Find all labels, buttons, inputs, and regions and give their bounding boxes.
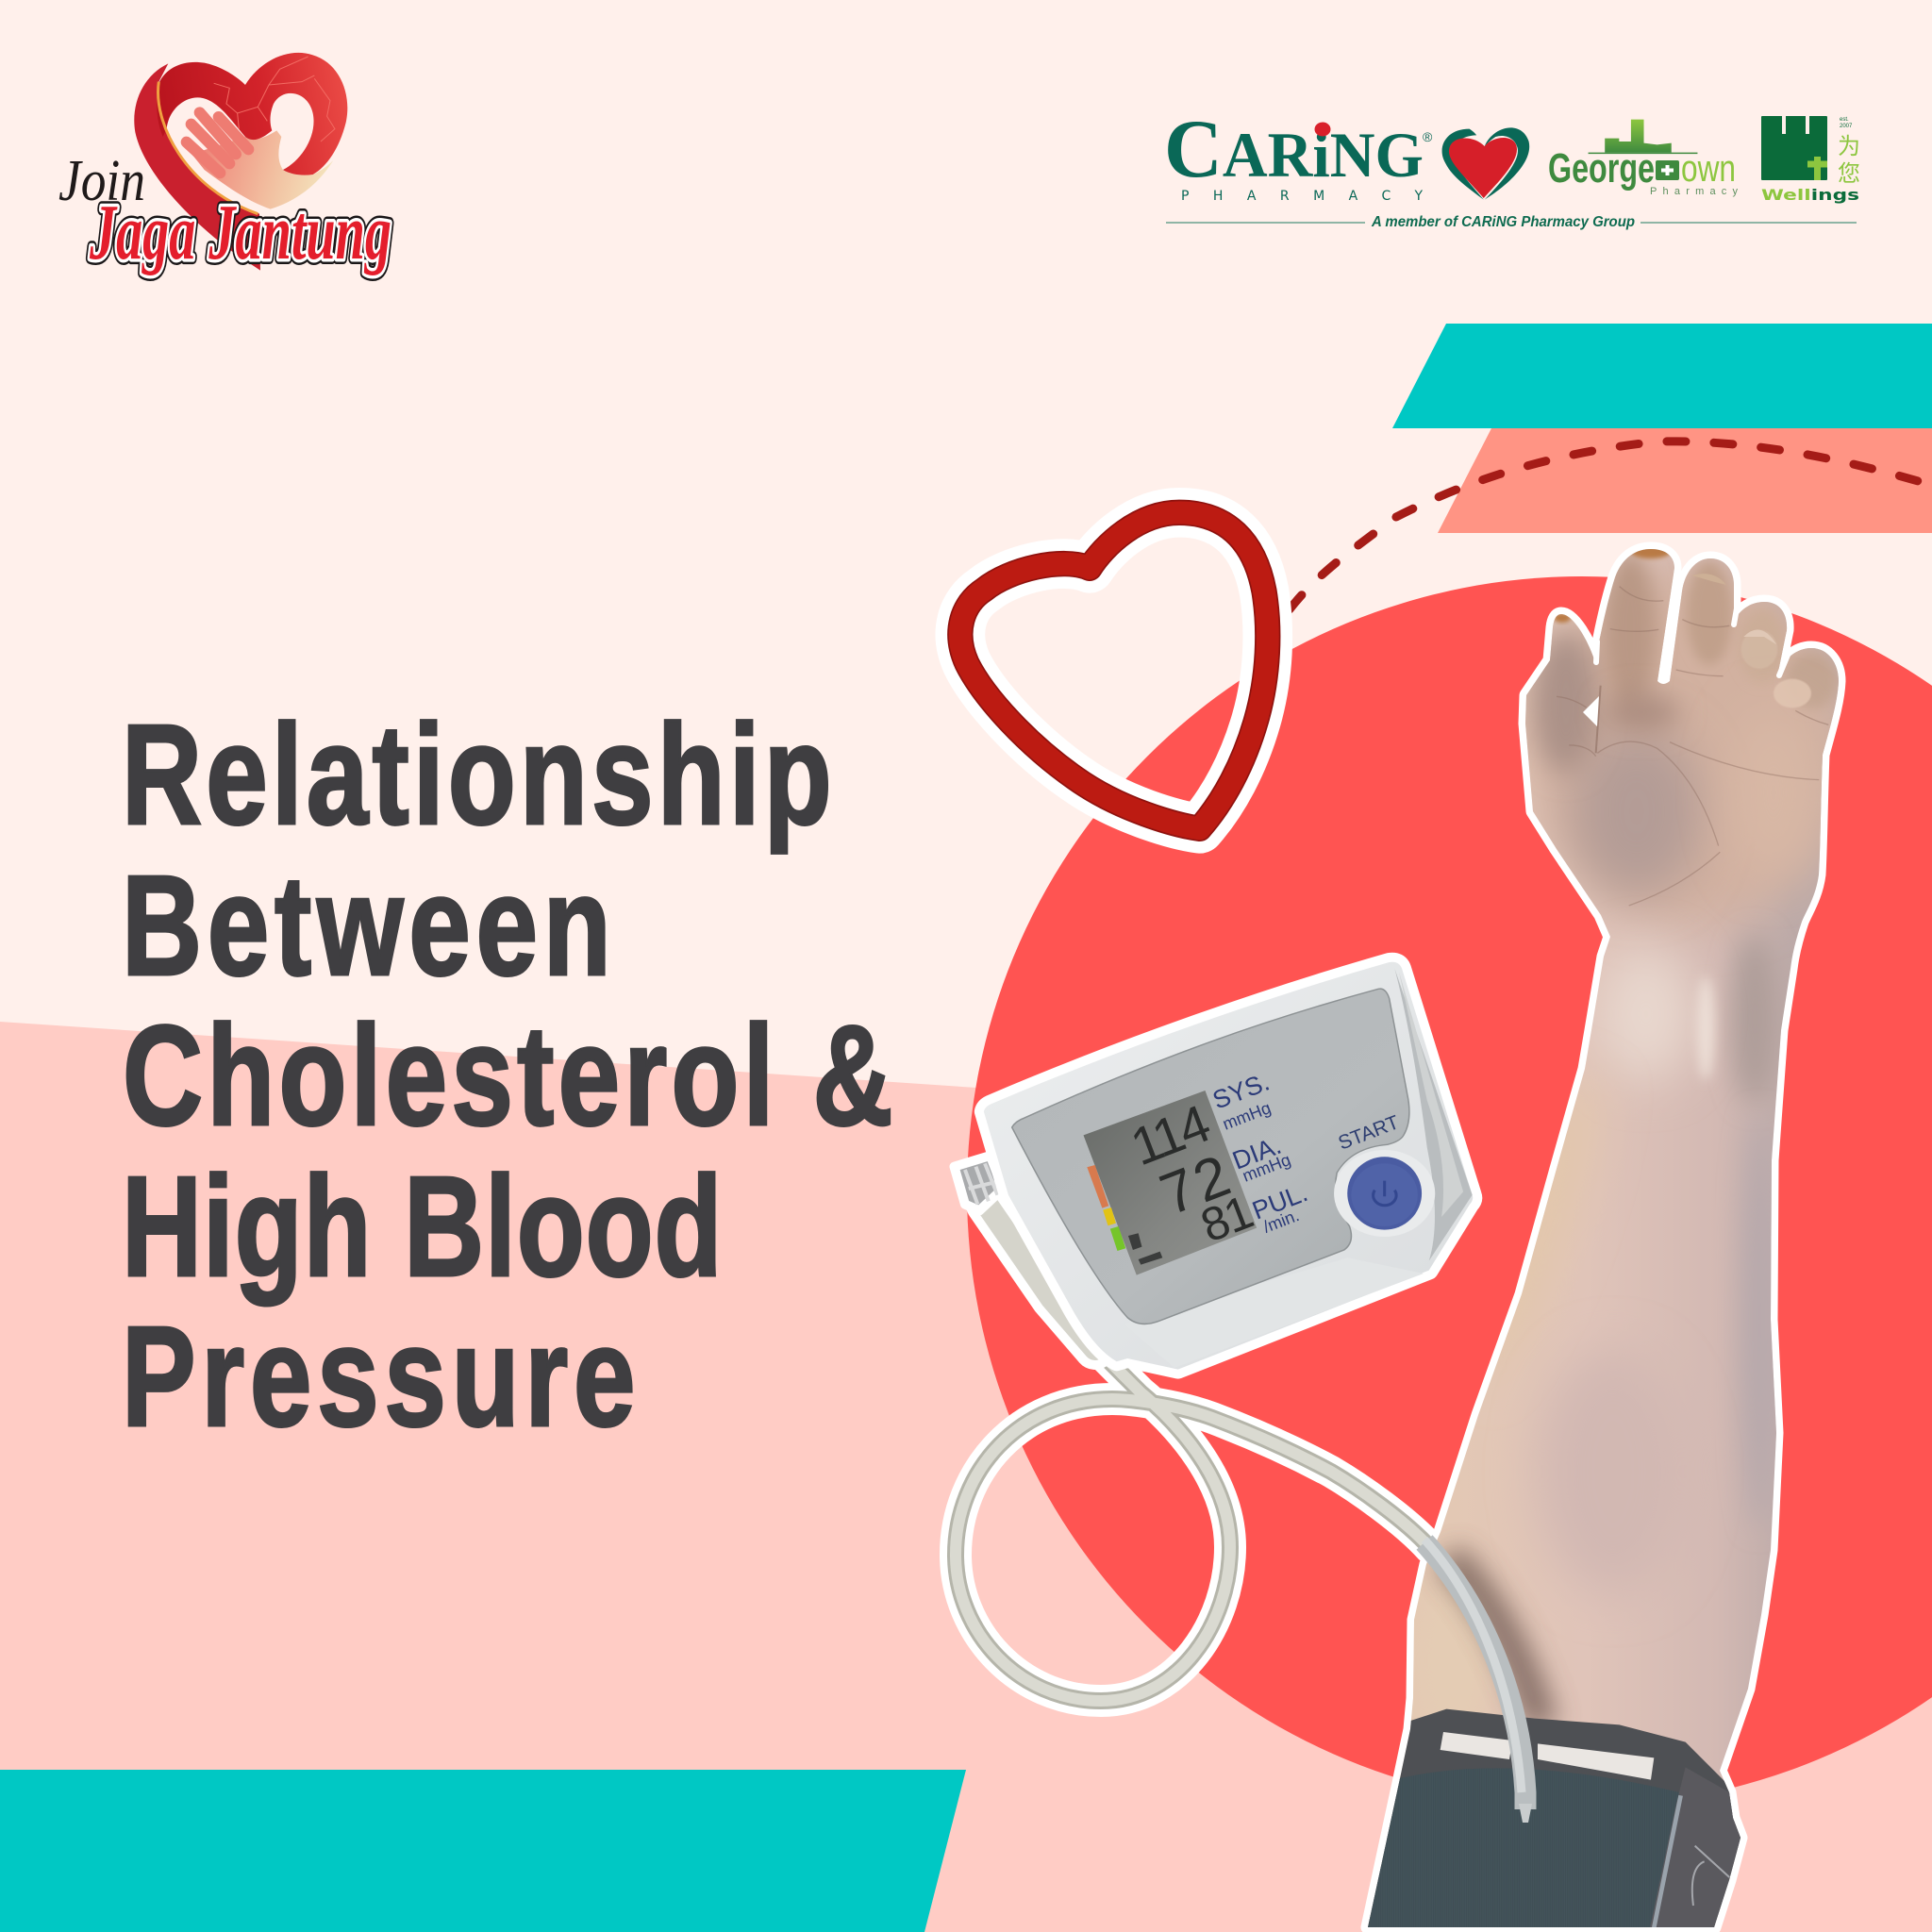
cuff (1368, 1709, 1740, 1927)
monitor housing (984, 962, 1473, 1370)
green block (1761, 116, 1827, 180)
teal band: bottom left (0, 1770, 966, 1932)
icon: heart ring (960, 512, 1268, 828)
red circle (967, 576, 1932, 1807)
cross box (1656, 160, 1679, 180)
arm skin (1352, 538, 1849, 1932)
logo: Georgetown Pharmacy (1548, 120, 1738, 197)
text: Join: Join (58, 149, 145, 213)
text: Jaga Jantung (89, 189, 391, 276)
member text: A member of CARiNG Pharmacy Group (1371, 214, 1635, 230)
title: Between (122, 845, 611, 1005)
cable white outline (956, 1357, 1430, 1701)
monitor labels: PUL. (1248, 1178, 1311, 1225)
grey panel (1012, 989, 1409, 1324)
title: High Blood (122, 1146, 722, 1306)
text: Jaga Jantung: Jaga Jantung (89, 189, 391, 276)
monitor labels: START (1336, 1111, 1402, 1155)
LCD readings: 81 (1193, 1185, 1260, 1253)
text: Jaga Jantung: Jaga Jantung (89, 189, 391, 276)
monitor labels: DIA. (1228, 1131, 1285, 1175)
cuff tube tip (1519, 1804, 1532, 1823)
title: Cholesterol & (123, 995, 893, 1155)
LCD readings: 114 (1123, 1092, 1218, 1176)
chinese characters: 为 (1838, 134, 1860, 159)
est. label: est. (1840, 117, 1849, 123)
title: Pressure (122, 1296, 635, 1456)
monitor labels: mmHg (1240, 1150, 1293, 1186)
text: own: own (1681, 148, 1736, 190)
monitor labels: /min. (1260, 1206, 1302, 1237)
icon: heart (1442, 127, 1529, 200)
housing right shade (1394, 969, 1473, 1261)
arm white cut-out outline (1368, 549, 1839, 1927)
LCD readings: 72 (1152, 1143, 1239, 1228)
year: 2007 (1840, 124, 1853, 129)
fingernails and creases (1557, 574, 1828, 906)
wrist and forearm shading (1415, 934, 1777, 1745)
logo: Wellings (1761, 116, 1860, 204)
monitor labels: mmHg (1220, 1098, 1274, 1134)
connector (954, 1156, 1095, 1349)
crease shadow beside cable (1448, 1557, 1542, 1726)
chinese characters 2: 您 (1838, 161, 1860, 187)
text: Jaga Jantung: Jaga Jantung (89, 189, 391, 276)
skyline (1589, 120, 1697, 153)
wordmark: Well ings (1761, 186, 1859, 204)
logo: Join Jaga Jantung (58, 53, 391, 276)
text: Pharmacy: Pharmacy (1650, 186, 1738, 197)
wordmark: CARiNG (1164, 104, 1424, 195)
start button (1334, 1150, 1435, 1237)
registered mark: ® (1423, 129, 1433, 144)
pressure colour bars (1087, 1165, 1108, 1208)
pink diagonal background panel (0, 1022, 1932, 1932)
LCD screen (1083, 1091, 1257, 1275)
blood pressure monitor (954, 962, 1473, 1370)
title: Relationship (122, 694, 832, 854)
LCD readings (1123, 1092, 1260, 1253)
plus sign (1807, 157, 1827, 180)
logo heart (134, 53, 347, 271)
arm and cuff photo (1352, 538, 1849, 1932)
white finger gaps and thumb gap (1596, 608, 1789, 675)
salmon band: top right (1438, 428, 1932, 533)
dashed arc from heart (1290, 441, 1932, 609)
title (122, 694, 893, 1456)
text: George: George (1548, 145, 1655, 192)
red dot (1315, 123, 1330, 136)
cable (956, 1357, 1532, 1823)
hand shading (1528, 543, 1849, 924)
logo: CARiNG Pharmacy (1164, 104, 1529, 204)
teal band: top right (1392, 324, 1932, 428)
text: pharmacy: PHARMACY (1181, 189, 1423, 204)
monitor labels (1208, 1068, 1402, 1237)
monitor labels: SYS. (1208, 1068, 1274, 1115)
